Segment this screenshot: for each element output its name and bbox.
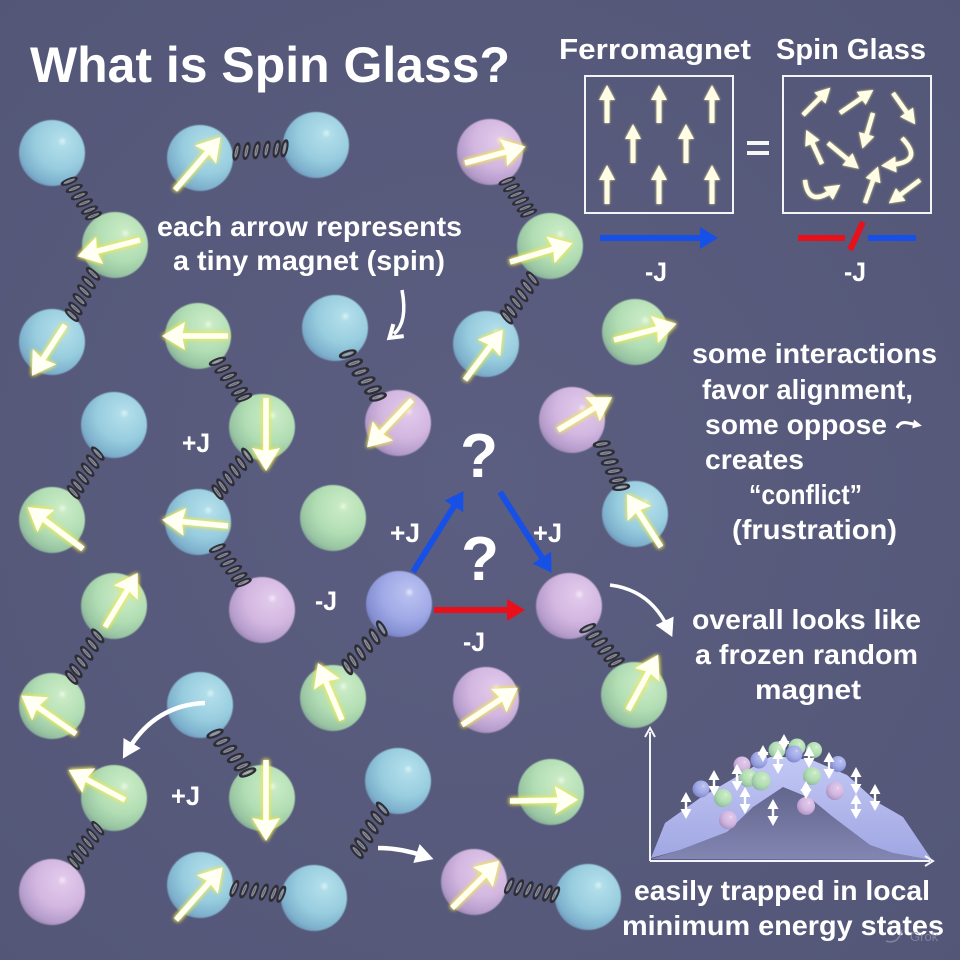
arrow: to frozen magnet xyxy=(610,585,668,628)
frustrated triangle: ? xyxy=(461,525,499,594)
glowing spin arrows on spheres xyxy=(32,147,664,920)
arrow: oppose creates xyxy=(897,423,918,428)
coupling labels: -J xyxy=(463,627,485,657)
coupling labels: +J xyxy=(182,428,210,458)
watermark: Grok xyxy=(910,929,939,944)
coupling labels: -J xyxy=(315,586,337,616)
caption: tiny magnet xyxy=(157,211,462,276)
coupling labels: +J xyxy=(533,518,562,548)
caption: tiny magnet: a tiny magnet (spin) xyxy=(173,245,445,276)
caption: local minimum xyxy=(622,875,944,941)
watermark xyxy=(886,929,939,944)
arrow: caption to spin xyxy=(394,290,404,334)
caption: frustration: (frustration) xyxy=(732,514,897,545)
coupling labels: +J xyxy=(171,781,200,811)
caption: frozen random magnet: a frozen random xyxy=(695,639,918,670)
title: What is Spin Glass? xyxy=(30,37,510,93)
double spin arrows xyxy=(686,739,875,821)
caption: frustration: some interactions xyxy=(692,338,937,369)
ferromagnet coupling arrow xyxy=(600,235,704,241)
caption: frozen random magnet xyxy=(692,604,921,705)
springs connecting spins xyxy=(60,140,630,904)
broken coupling symbol xyxy=(798,222,916,250)
coupling labels xyxy=(171,428,562,811)
caption: frustration xyxy=(692,338,937,545)
caption: frustration: “conflict” xyxy=(749,479,862,510)
label: -J ferromagnet: -J xyxy=(645,257,667,287)
small energy spheres xyxy=(692,738,846,829)
panel: spin glass random arrows xyxy=(783,76,931,213)
caption: frozen random magnet: overall looks like xyxy=(692,604,921,635)
panel: ferromagnet aligned arrows xyxy=(585,76,733,213)
chart: energy landscape xyxy=(645,728,933,866)
caption: local minimum: minimum energy states xyxy=(622,910,944,941)
caption: tiny magnet: each arrow represents xyxy=(157,211,462,242)
caption: frustration: creates xyxy=(705,444,804,475)
arrow: white curve left xyxy=(128,703,205,750)
coupling labels: +J xyxy=(390,518,420,548)
caption: frustration: some oppose xyxy=(705,409,887,440)
label: -J spin glass: -J xyxy=(844,257,866,287)
heading: Spin Glass: Spin Glass xyxy=(776,34,926,66)
caption: frustration: favor alignment, xyxy=(702,374,913,405)
caption: frozen random magnet: magnet xyxy=(755,674,861,705)
frustrated triangle: ? xyxy=(460,422,498,491)
spin spheres xyxy=(19,112,668,931)
frustrated triangle xyxy=(413,422,544,610)
arrow: white curve bottom xyxy=(378,848,424,856)
heading: Ferromagnet: Ferromagnet xyxy=(559,34,751,66)
equals sign xyxy=(747,141,769,155)
caption: local minimum: easily trapped in local xyxy=(634,875,930,906)
